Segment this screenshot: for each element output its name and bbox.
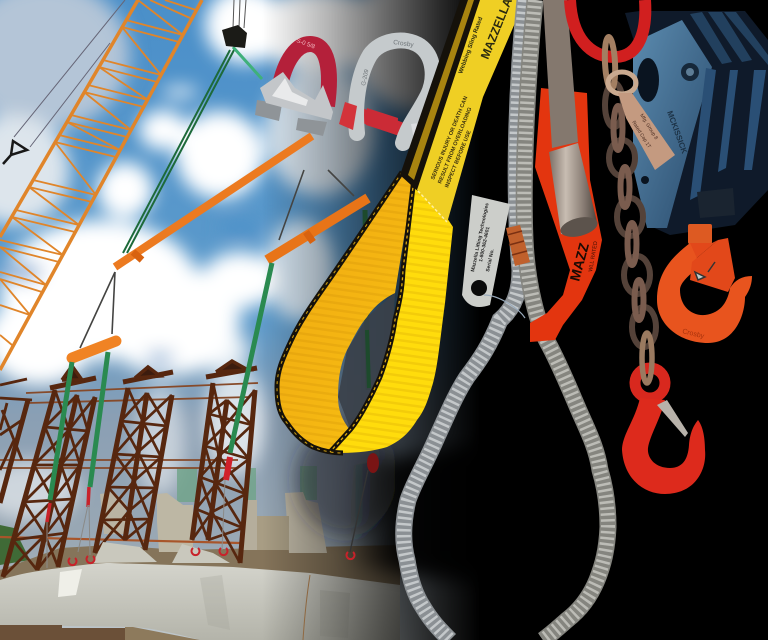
orange crane hook: Crosby: [682, 328, 705, 340]
bronze chain identification tag: Rated Cap 1T: [630, 120, 652, 149]
strap warning tag: Webbing Sling Rated: [458, 16, 484, 75]
crane boom: [0, 0, 202, 370]
crane wires and hook block: [3, 0, 246, 164]
strap inner shadow hole: [338, 293, 395, 428]
strap rear fold: [277, 170, 415, 453]
metal identification tag: 1-800-362-4601: [478, 226, 491, 262]
strap front strand: [335, 170, 453, 453]
strap warning tag: RESULT FROM OVERLOADING: [437, 107, 473, 185]
orange synthetic sling tag: WLL RATED: [588, 241, 599, 272]
red wire rope clip: S-0 5/8: [295, 38, 316, 51]
orange crane hook: [657, 224, 752, 343]
forged steel shackle with red pin: [339, 39, 435, 150]
red wire rope clip: [255, 38, 333, 136]
tower 4: [192, 361, 257, 563]
green slings and wire rigging: [47, 47, 379, 568]
wire rope sling loop: left strand: [404, 0, 525, 640]
orange synthetic sling tag: [530, 88, 602, 342]
chain edge-on links: [604, 37, 644, 320]
red chain hook with latch: [622, 333, 705, 494]
strap warning tag: [417, 0, 525, 223]
blue multi-sheave block: [625, 11, 768, 235]
steel bridge towers: [0, 361, 258, 577]
concrete bridge segment: [0, 542, 400, 640]
orange synthetic sling tag: MAZZ: [566, 241, 592, 283]
fade from daylight scene to black: [262, 0, 480, 640]
strap warning tag: INSPECT BEFORE USE: [444, 130, 473, 189]
tower 2: [3, 366, 96, 577]
strap black stitched edges: [277, 170, 415, 453]
bronze chain identification tag: Mfg. Group 8: [638, 113, 659, 141]
yellow lifting sling strap: [277, 0, 525, 453]
load chain: [604, 37, 656, 347]
metal identification tag: Serial No.: [485, 248, 496, 272]
metal identification tag: Mazzella Lifting Technologies: [470, 202, 491, 272]
block and its cable: [222, 25, 247, 48]
metal identification tag: [462, 195, 530, 318]
dark storm sky and trees at lower right: [295, 425, 500, 585]
bronze chain identification tag: [608, 72, 675, 170]
ground and distant bridge piers: [0, 466, 400, 600]
wire rope sling loop: right strand: [524, 0, 608, 640]
blue multi-sheave block: MCKISSICK: [665, 110, 689, 155]
wire rope and steel ferrule: [543, 0, 600, 240]
spreader beams: [72, 136, 368, 358]
red master link: [570, 0, 645, 57]
forged steel shackle with red pin: Crosby: [393, 39, 415, 49]
forged steel shackle with red pin: G-209: [361, 68, 371, 86]
strap warning tag: SERIOUS INJURY OR DEATH CAN: [430, 96, 469, 181]
tower 1: [0, 379, 32, 503]
tower 3: [95, 367, 173, 553]
